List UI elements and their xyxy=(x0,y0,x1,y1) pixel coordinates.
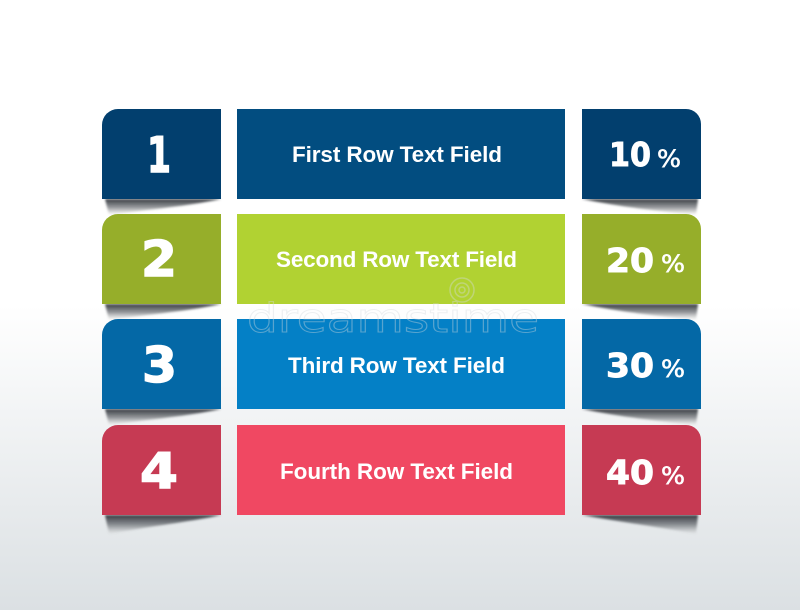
number 3: 3 xyxy=(142,337,177,394)
shadow: row 2 left xyxy=(105,304,221,320)
label 1: First Row Text Field xyxy=(292,142,502,167)
text field 2 xyxy=(237,214,565,304)
number 4: 4 xyxy=(140,443,178,500)
row 2 xyxy=(102,214,701,320)
label 2: Second Row Text Field xyxy=(276,247,517,272)
value tab 4 xyxy=(582,425,701,515)
label 4: Fourth Row Text Field xyxy=(280,459,513,484)
row 1 xyxy=(102,109,701,215)
shadow: row 1 right xyxy=(582,199,698,215)
value 30: 30 xyxy=(606,346,654,385)
shadow: row 4 left xyxy=(105,515,221,534)
shadow: row 2 right xyxy=(582,304,698,320)
shadow: row 3 left xyxy=(105,409,221,425)
number 2: 2 xyxy=(141,231,177,288)
text field 1 xyxy=(237,109,565,199)
number tab 2 xyxy=(102,214,221,304)
shadow: row 1 left xyxy=(105,199,221,215)
text field 3 xyxy=(237,319,565,409)
row 3 xyxy=(102,319,701,425)
value tab 2 xyxy=(582,214,701,304)
value 20: 20 xyxy=(606,241,654,280)
percent 1: % xyxy=(657,145,681,173)
percent 2: % xyxy=(661,250,685,278)
value tab 3 xyxy=(582,319,701,409)
value 40: 40 xyxy=(606,453,654,492)
number tab 3 xyxy=(102,319,221,409)
percent 4: % xyxy=(661,462,685,490)
watermark spiral xyxy=(450,278,474,302)
watermark xyxy=(247,278,539,342)
shadow: row 3 right xyxy=(582,409,698,425)
row 4 xyxy=(102,425,701,534)
number tab 1 xyxy=(102,109,221,199)
value 10: 10 xyxy=(609,135,651,174)
shadow: row 4 right xyxy=(582,515,698,534)
percent 3: % xyxy=(661,355,685,383)
number 1: 1 xyxy=(147,127,171,184)
watermark wordmark: dreamstime xyxy=(247,296,539,342)
label 3: Third Row Text Field xyxy=(288,353,505,378)
number tab 4 xyxy=(102,425,221,515)
text field 4 xyxy=(237,425,565,515)
value tab 1 xyxy=(582,109,701,199)
